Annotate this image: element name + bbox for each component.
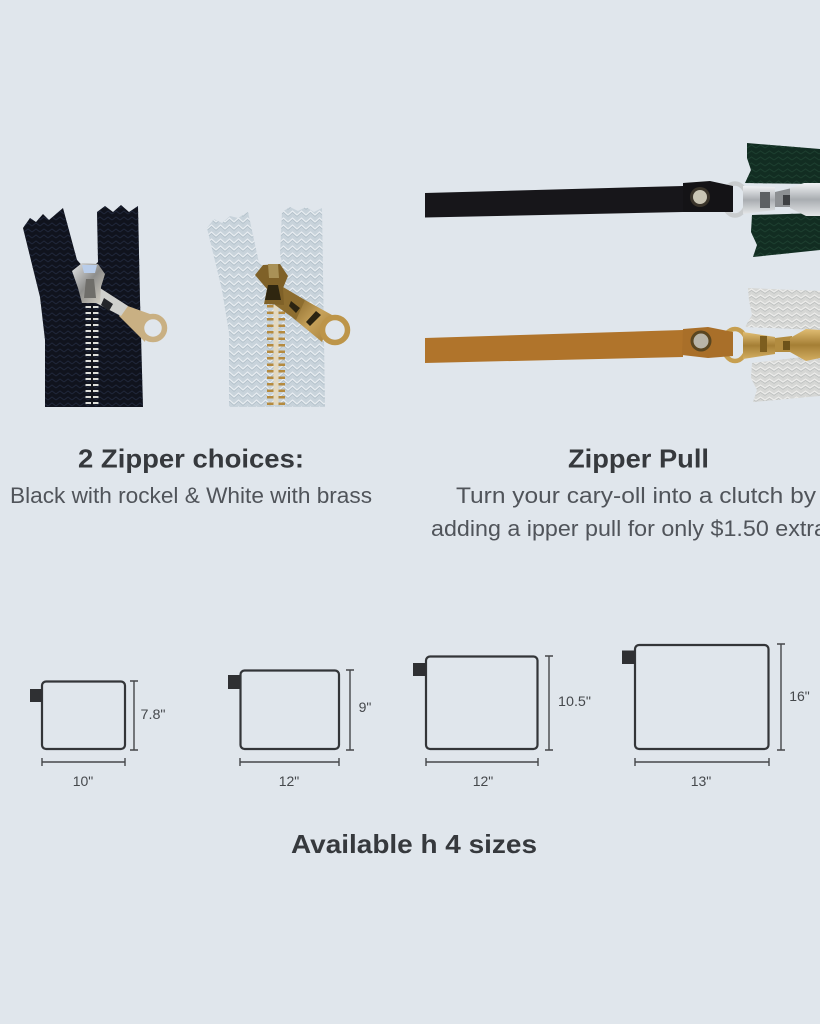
icon: black leather zipper pull bbox=[425, 143, 820, 257]
diagram: size 12 by 10.5 bbox=[413, 656, 591, 789]
icon: white zipper with brass teeth bbox=[207, 207, 348, 407]
diagram: size 10 by 7.8: 7.8" bbox=[140, 706, 166, 722]
icon: brass zipper pull tab bbox=[255, 264, 348, 342]
diagram: size 13 by 16: 13" bbox=[691, 773, 711, 789]
diagram: size 12 by 9 bbox=[228, 670, 371, 789]
icon: tan leather zipper pull bbox=[425, 288, 820, 402]
icon: dark green zipper tape bbox=[745, 143, 820, 257]
diagram: size 12 by 10.5: 12" bbox=[473, 773, 493, 789]
icon: black zipper with nickel teeth bbox=[23, 205, 164, 407]
diagram: size 12 by 10.5: 10.5" bbox=[558, 693, 591, 709]
heading: zipper pull: Zipper Pull bbox=[568, 444, 709, 474]
icon: white zipper tape bbox=[745, 288, 820, 402]
heading: 2 zipper choices: 2 Zipper choices: bbox=[78, 444, 304, 474]
diagram: size 13 by 16 bbox=[622, 644, 810, 789]
text: zipper pull description bbox=[431, 483, 820, 541]
diagram: size 13 by 16: 16" bbox=[789, 688, 810, 704]
text: zipper pull description: adding a ipper pull for only $1.50 extra bbox=[431, 516, 820, 541]
diagram: size 10 by 7.8 bbox=[30, 681, 166, 789]
text: zipper pull description: Turn your cary-oll into a clutch by bbox=[456, 483, 816, 508]
icon: nickel zipper pull tab bbox=[72, 263, 164, 342]
diagram: size 12 by 9: 12" bbox=[279, 773, 299, 789]
text: zipper choices description: Black with rockel & White with brass bbox=[10, 483, 372, 508]
heading: available sizes: Available h 4 sizes bbox=[291, 829, 537, 859]
diagram: size 12 by 9: 9" bbox=[359, 699, 371, 715]
diagram: size 10 by 7.8: 10" bbox=[73, 773, 93, 789]
